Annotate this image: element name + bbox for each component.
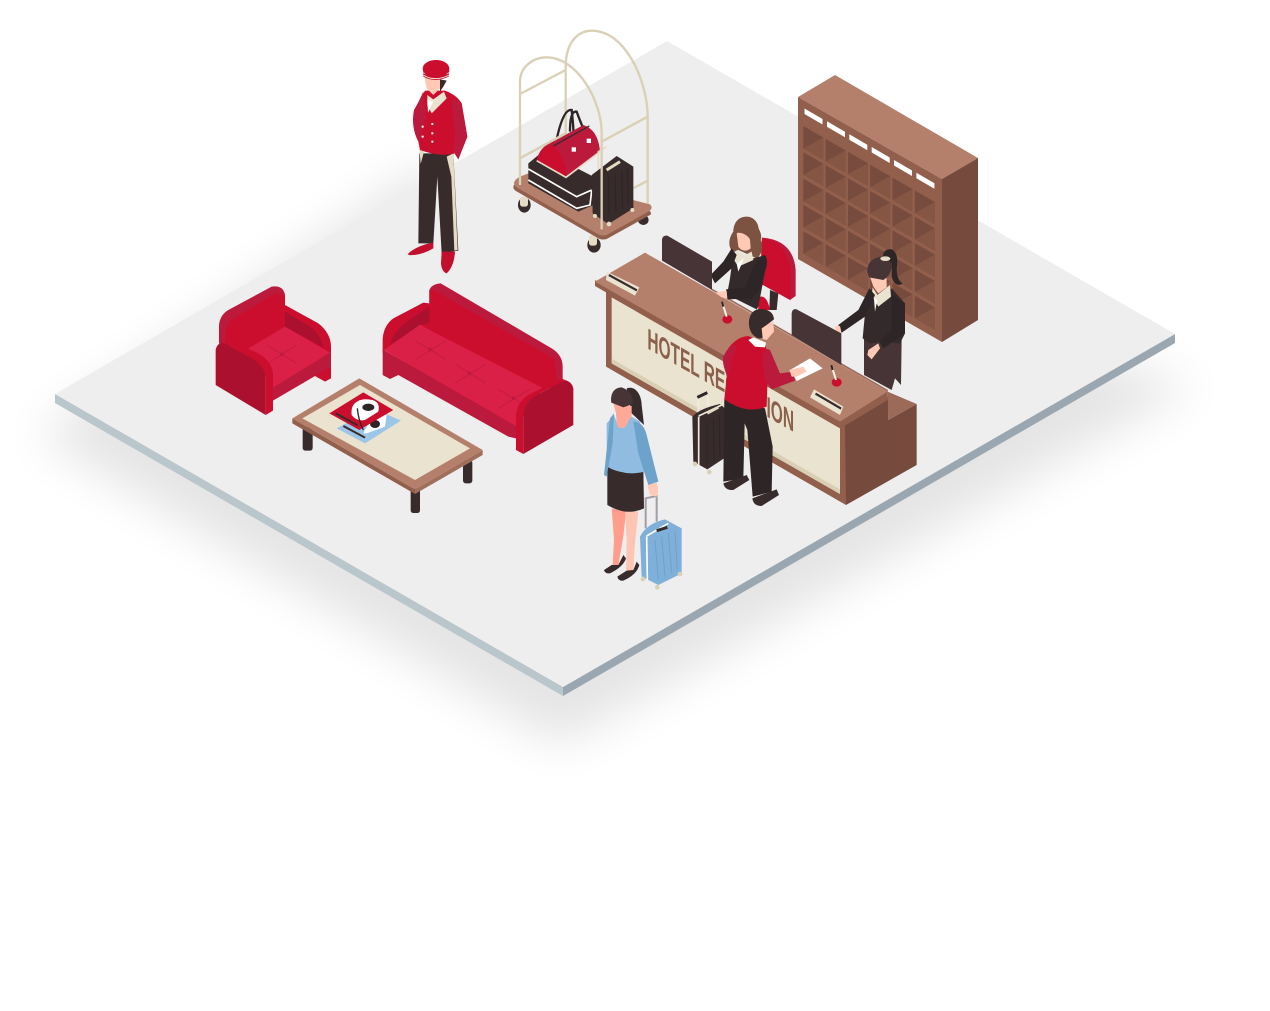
luggage cart (513, 31, 652, 253)
armchair front arm (216, 343, 273, 415)
large black case (528, 151, 593, 212)
bellhop face (424, 77, 447, 95)
woman guest with blue suitcase (604, 387, 682, 590)
pen stand right (831, 365, 842, 387)
right monitor (792, 309, 841, 365)
woman shoes (604, 555, 639, 581)
clerk face (737, 233, 751, 251)
table legs (303, 427, 472, 513)
sofa (383, 283, 573, 454)
clerk jacket (711, 248, 767, 309)
woman skirt (607, 467, 644, 512)
key shelf pigeonholes (803, 126, 935, 330)
guest black suitcase (692, 393, 727, 474)
guest sweater (723, 336, 795, 410)
bellhop trousers (418, 148, 458, 253)
clerk hair (729, 217, 762, 258)
bellhop jacket (413, 91, 467, 159)
bellhop shoes (408, 243, 455, 273)
woman hand (647, 483, 658, 497)
male guest (723, 309, 807, 506)
woman legs (612, 508, 638, 572)
magazines (329, 392, 401, 443)
guest hair (749, 309, 774, 338)
bellhop hat (423, 60, 449, 80)
table top (292, 378, 483, 494)
paper sheet (790, 358, 823, 381)
ponytail (883, 249, 903, 285)
cart front arch (520, 57, 602, 229)
clerk hands (834, 326, 880, 359)
armchair (216, 286, 331, 415)
sofa seat cushions (383, 325, 543, 438)
clerk hand (715, 291, 727, 299)
coffee table (292, 378, 483, 513)
guest hand (789, 367, 807, 377)
pen stand left (722, 302, 732, 324)
clerk skirt (864, 337, 902, 390)
floor platform (55, 41, 1175, 696)
woman hair back (627, 388, 644, 425)
desk sign text: HOTEL RECEPTION (647, 321, 794, 439)
right nameplate (810, 389, 843, 415)
standing clerk (834, 249, 905, 390)
reception desk (595, 253, 917, 505)
clerk chair (758, 238, 796, 310)
cart wheels (518, 197, 649, 253)
sofa right arm (516, 378, 573, 454)
bellhop (408, 60, 467, 273)
floor shadow (38, 170, 1195, 745)
suitcase handle (646, 496, 657, 528)
seated clerk (711, 217, 767, 309)
small black suitcase (592, 147, 634, 226)
key shelf labels (804, 108, 934, 189)
cart platform (513, 173, 652, 240)
guest face (760, 322, 774, 340)
clerk hair (867, 256, 892, 280)
red duffel bag (537, 110, 600, 177)
desk side (845, 392, 917, 505)
clerk face (869, 275, 887, 293)
woman face and neck (613, 403, 632, 428)
left nameplate (606, 272, 639, 296)
desk front panel (606, 283, 846, 505)
clerk jacket (838, 285, 905, 348)
key shelf cabinet (798, 75, 978, 342)
armchair seat cushion (248, 327, 331, 401)
left monitor (662, 236, 712, 290)
guest trousers (723, 398, 773, 497)
guest shoes (723, 475, 779, 506)
guest collar (748, 337, 766, 347)
desk counter top (595, 253, 888, 427)
woman blouse (604, 413, 658, 485)
woman hair front (611, 387, 633, 407)
blue suitcase (640, 519, 682, 590)
cart back arch (566, 31, 648, 205)
right monitors (662, 236, 841, 365)
